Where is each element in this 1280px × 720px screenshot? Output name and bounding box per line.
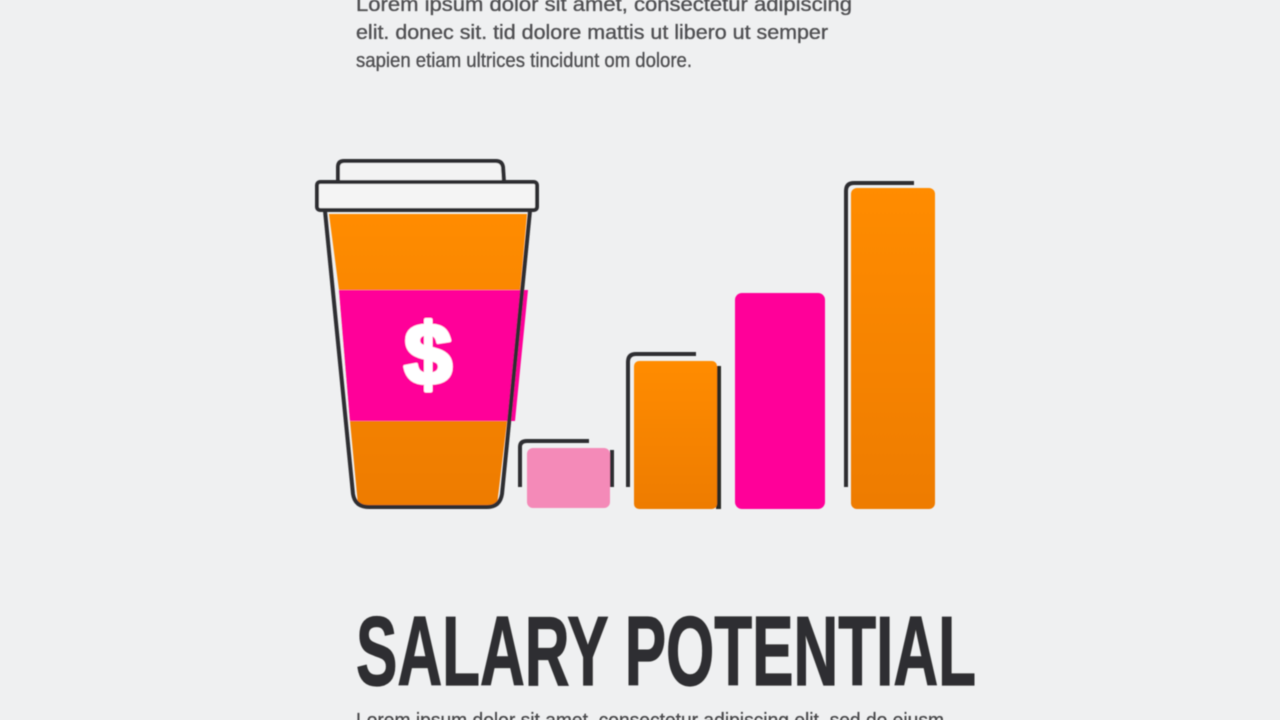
bar 1	[527, 448, 610, 508]
icon: coffee cup with dollar sign	[317, 161, 537, 507]
cup lid rim	[317, 182, 537, 210]
intro text block	[356, 0, 852, 72]
bar 2	[634, 361, 717, 509]
cup outline	[325, 211, 530, 507]
bar chart: rising salary bars	[520, 183, 935, 509]
cup orange fill	[329, 214, 527, 505]
cup lid top	[338, 161, 504, 182]
bar 4 outline	[846, 183, 914, 487]
cup pink sleeve	[339, 290, 528, 421]
bar 2 right edge	[716, 366, 721, 509]
intro text block: elit. donec sit. tid dolore mattis ut libero ut semper	[356, 22, 828, 44]
bar 3	[735, 293, 825, 509]
bar 1 outline	[520, 441, 612, 487]
intro text block: sapien etiam ultrices tincidunt om dolore.	[356, 50, 692, 72]
dollar sign: $	[404, 307, 452, 403]
bar 4	[851, 188, 935, 509]
bar 2 outline	[628, 354, 696, 487]
